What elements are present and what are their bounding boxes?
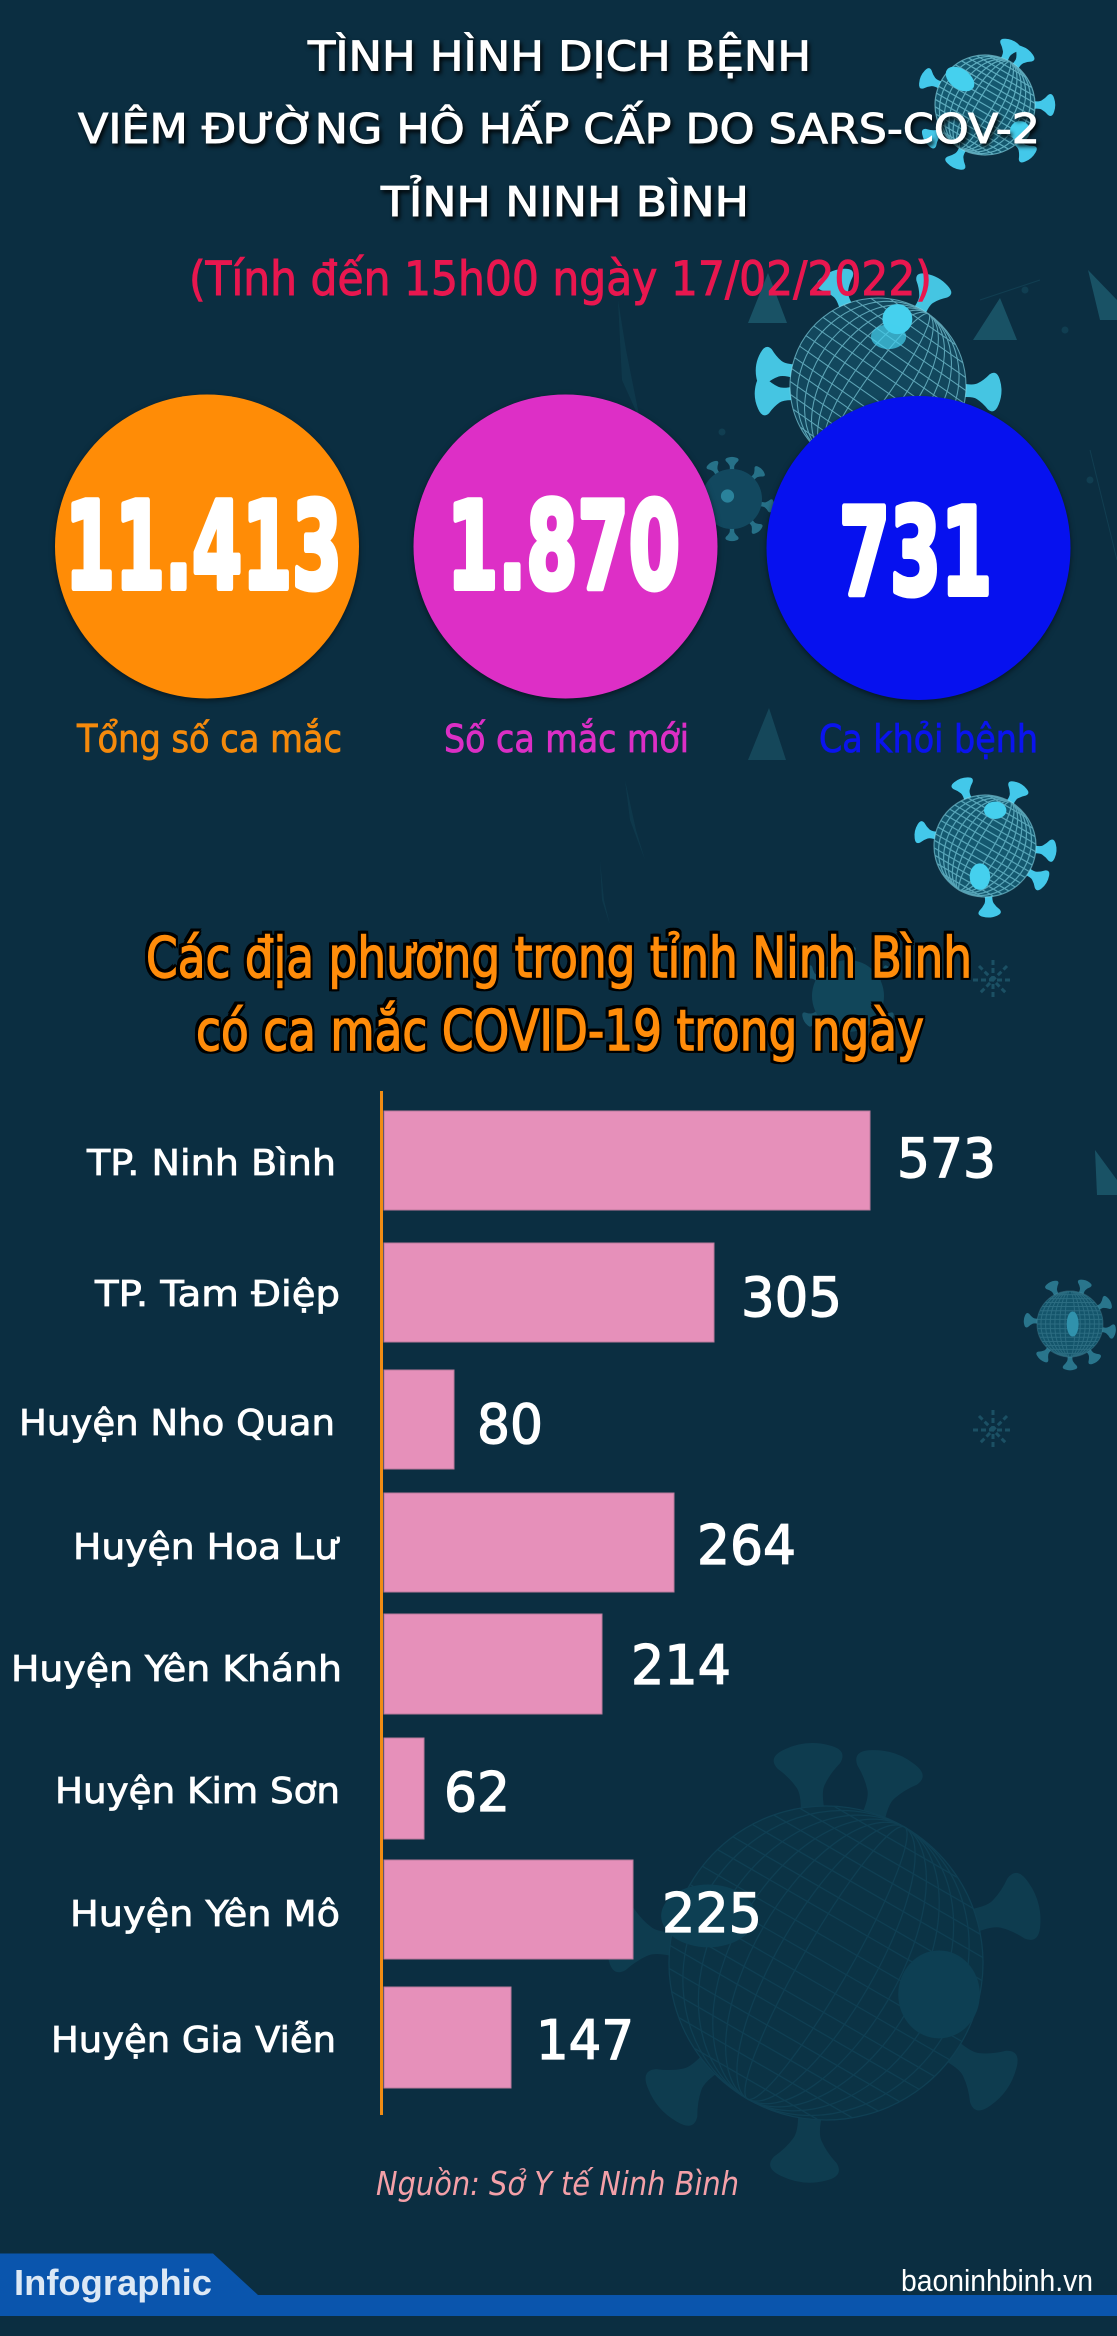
stat: new cases: 1.870 <box>447 478 680 617</box>
title <box>78 32 1040 226</box>
bar: TP. Tam Điệp: 305 <box>741 1266 842 1329</box>
icon: dim virus behind heading <box>800 945 896 1032</box>
date subtitle: (Tính đến 15h00 ngày 17/02/2022) <box>189 252 932 307</box>
bar: TP. Ninh Bình: 573 <box>897 1127 996 1190</box>
bar: TP. Tam Điệp: TP. Tam Điệp <box>94 1274 340 1315</box>
bar: Huyện Kim Sơn: 62 <box>444 1761 510 1824</box>
title: VIÊM ĐƯỜNG HÔ HẤP CẤP DO SARS-COV-2 <box>78 101 1040 153</box>
bar: Huyện Gia Viễn: Huyện Gia Viễn <box>51 2020 336 2061</box>
stat: new cases: Số ca mắc mới <box>444 717 689 761</box>
footer band <box>0 2254 1117 2316</box>
icon: large faint virus bottom <box>603 1740 1048 2186</box>
bar: Huyện Hoa Lư <box>73 1493 796 1592</box>
icon: snowflake particles <box>973 960 1013 1450</box>
stat: recovered: 731 <box>839 484 992 623</box>
background network decoration <box>600 270 1117 1195</box>
bar: Huyện Yên Mô: 225 <box>662 1882 762 1945</box>
bar: Huyện Hoa Lư: Huyện Hoa Lư <box>73 1527 340 1568</box>
bar: Huyện Yên Mô: Huyện Yên Mô <box>70 1894 340 1935</box>
bar: TP. Ninh Bình <box>86 1111 996 1210</box>
bar: Huyện Yên Khánh: Huyện Yên Khánh <box>11 1649 342 1690</box>
stat: total cases: 11.413 <box>65 478 342 617</box>
bar: Huyện Yên Khánh: 214 <box>631 1634 731 1697</box>
icon: virus top right <box>916 36 1055 173</box>
stat: recovered: Ca khỏi bệnh <box>819 717 1038 761</box>
icon: small virus between circles <box>702 457 775 541</box>
bar: TP. Ninh Bình: TP. Ninh Bình <box>86 1143 336 1184</box>
footer band: Infographic <box>14 2262 212 2303</box>
bar: Huyện Gia Viễn <box>51 1987 634 2088</box>
stat: total cases <box>55 394 359 761</box>
bar: Huyện Yên Khánh <box>11 1614 731 1714</box>
bar: Huyện Kim Sơn: Huyện Kim Sơn <box>55 1771 340 1812</box>
bar chart <box>11 1091 996 2115</box>
stat: recovered <box>766 396 1070 761</box>
bar: Huyện Hoa Lư: 264 <box>697 1514 796 1577</box>
title: TỈNH NINH BÌNH <box>380 175 749 226</box>
icon: large virus behind blue circle <box>753 263 1002 509</box>
icon: virus right of captions <box>913 775 1057 918</box>
bar: Huyện Nho Quan <box>19 1370 543 1469</box>
stat: new cases <box>414 394 718 761</box>
bar: Huyện Kim Sơn <box>55 1738 510 1839</box>
stat: total cases: Tổng số ca mắc <box>76 717 342 761</box>
bar: Huyện Yên Mô <box>70 1860 762 1959</box>
title: TÌNH HÌNH DỊCH BỆNH <box>307 32 811 80</box>
bar: Huyện Nho Quan: 80 <box>477 1393 543 1456</box>
source note: Nguồn: Sở Y tế Ninh Bình <box>376 2164 739 2203</box>
bar: Huyện Gia Viễn: 147 <box>536 2009 634 2072</box>
chart heading: có ca mắc COVID-19 trong ngày <box>196 999 924 1064</box>
chart heading <box>146 926 972 1064</box>
footer band: baoninhbinh.vn <box>901 2263 1093 2298</box>
icon: dim virus right of chart <box>1023 1278 1117 1370</box>
bar: Huyện Nho Quan: Huyện Nho Quan <box>19 1403 335 1444</box>
bar: TP. Tam Điệp <box>94 1243 842 1342</box>
